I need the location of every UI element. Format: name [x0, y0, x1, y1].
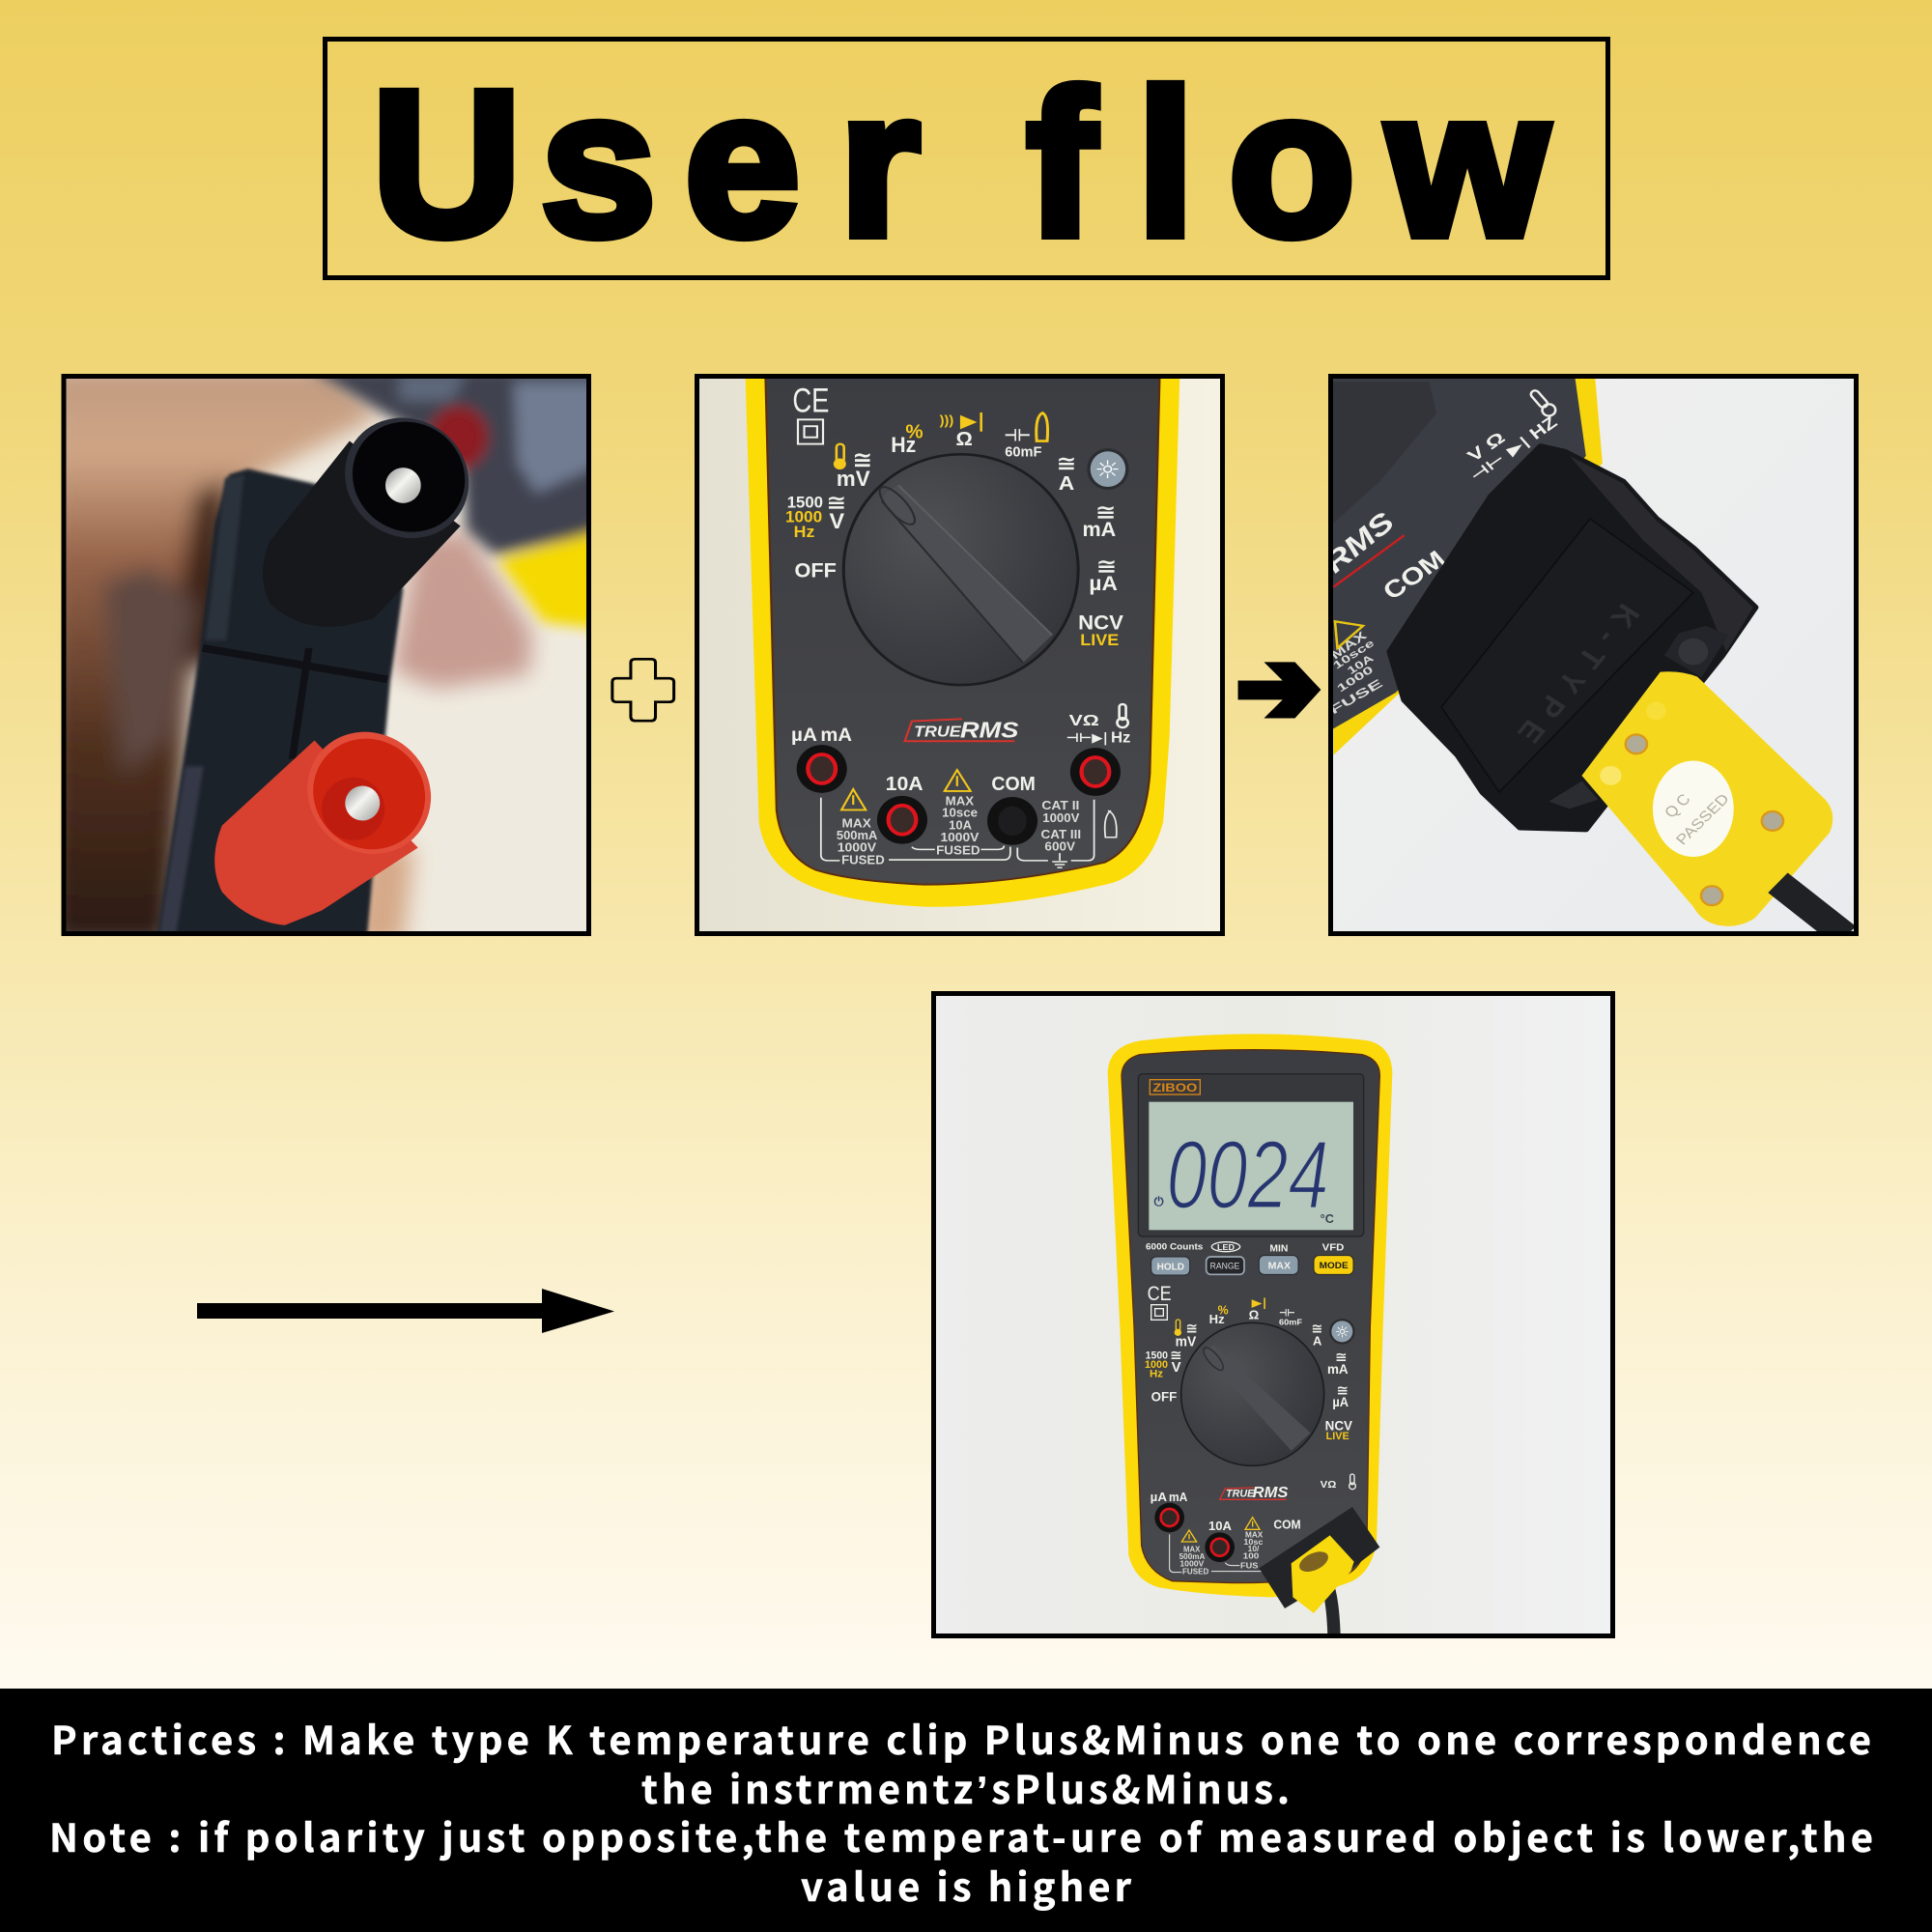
yellow plug [1292, 1535, 1354, 1613]
circuit rating text: CAT II [1041, 798, 1079, 812]
rotated meter labels [1318, 412, 1561, 717]
footer background [0, 1689, 1932, 1932]
TrueRMS logo: TRUE [914, 723, 961, 740]
jack sockets [1154, 1503, 1235, 1562]
jack labels: 10A [1208, 1519, 1232, 1533]
degree unit: °C [1321, 1212, 1334, 1226]
panel: complete multimeter photo [931, 991, 1615, 1638]
rotated meter labels: 10sce [1331, 638, 1377, 671]
circuit rating text: 1000V [940, 830, 980, 844]
dial labels: NCV [1325, 1418, 1353, 1434]
note line 2: value is higher [801, 1857, 1132, 1913]
note line 1: Note : if polarity just opposite,the temperat-ure of measured object is lower,the [49, 1807, 1873, 1863]
upper dial labels: ⊣⊢ [1279, 1307, 1295, 1320]
meter yellow housing [1108, 1034, 1392, 1597]
input jack labels: Hz [1111, 727, 1130, 746]
circuit rating text: CAT III [1041, 827, 1081, 841]
rotated meter labels: COM [1378, 546, 1451, 605]
ZIBOO logo [1150, 1080, 1200, 1094]
button labels [1146, 1241, 1344, 1254]
black connector body [156, 469, 403, 947]
dial labels: OFF [1151, 1389, 1178, 1405]
dial labels: ≅ [1336, 1383, 1349, 1399]
icon: thermometer [834, 444, 846, 469]
jack sockets [797, 745, 1121, 845]
dial labels: ⊣⊢ [1004, 427, 1031, 445]
RANGE button [1207, 1257, 1244, 1274]
dial labels: Hz [794, 523, 814, 541]
circuit rating text: 600V [1044, 838, 1076, 853]
dial labels: ≅ [1170, 1348, 1182, 1363]
HOLD button: HOLD [1157, 1262, 1184, 1272]
rating text [1179, 1531, 1264, 1576]
dial labels: 1500 [1146, 1350, 1168, 1362]
TrueRMS logo: TRUE [1226, 1488, 1255, 1499]
panel frame: meter close-up [697, 377, 1223, 933]
panel frame: complete multimeter [933, 993, 1613, 1636]
upper dial labels [1209, 1296, 1302, 1326]
black K-type connector: K-TYPE [1511, 598, 1647, 749]
rotary dial [843, 454, 1078, 685]
photo background [694, 367, 1226, 947]
panel: plug tips photo [66, 379, 586, 931]
double insulation icon [798, 419, 823, 444]
dial labels: ≅ [826, 492, 846, 515]
jack labels [1151, 1480, 1336, 1533]
rotated meter labels: 1000 [1335, 665, 1376, 695]
rotated meter labels: FUSE [1326, 676, 1385, 717]
dial labels: 1000 [785, 508, 822, 526]
panel: connector plugged into meter photo [1318, 367, 1862, 947]
upper dial labels: ▶| [1252, 1296, 1267, 1310]
red probe socket [214, 732, 431, 925]
dial labels: % [905, 420, 923, 442]
icon: thermometer white [1350, 1474, 1355, 1490]
input jack labels: VΩ [1069, 711, 1099, 729]
dial labels: OFF [795, 558, 837, 582]
power glyph: ⏻ [1154, 1194, 1165, 1208]
arrow: block arrow to result [1238, 662, 1321, 719]
circuit rating text: MAX [946, 793, 975, 808]
dial labels: V [830, 510, 844, 533]
dial labels: Hz [891, 434, 916, 458]
dial labels: mV [837, 469, 870, 492]
dial labels: ≅ [852, 446, 872, 473]
rating text: 100 [1243, 1551, 1260, 1560]
TrueRMS logo: RMS [960, 719, 1019, 743]
red label line [1333, 534, 1405, 588]
button labels: VFD [1322, 1243, 1344, 1254]
input jack labels: mA [820, 724, 852, 746]
jack connector lines [821, 798, 1117, 867]
yellow K-type plug [1581, 671, 1833, 926]
upper dial labels: Hz [1209, 1312, 1225, 1326]
dial labels: V [1172, 1360, 1181, 1376]
rating text: FUSED [1182, 1567, 1209, 1576]
jack labels: µA [1151, 1490, 1167, 1504]
TrueRMS logo: RMS [1253, 1485, 1289, 1501]
CE mark and insulation icon: CE [1148, 1282, 1172, 1305]
input jack labels [792, 715, 1130, 790]
icon: thermometer [1175, 1320, 1181, 1336]
button labels: 6000 Counts [1146, 1241, 1203, 1251]
meter dark face [1122, 1050, 1379, 1583]
MAX button [1259, 1256, 1298, 1274]
input jack labels: µA [791, 724, 817, 746]
LCD reading: 0024 [1166, 1122, 1329, 1230]
dial labels [1145, 1321, 1353, 1442]
backlight button: ☼ [1094, 456, 1121, 484]
CE mark: CE [792, 382, 830, 419]
arrow: long arrow to final result [197, 1289, 614, 1333]
dial labels: ≅ [1095, 501, 1117, 525]
circuit rating text: MAX [842, 815, 872, 830]
rotated meter labels: MAX [1327, 628, 1370, 662]
meter yellow housing [745, 367, 1180, 907]
thermocouple cable [1328, 1587, 1334, 1635]
dial labels: Ω [955, 428, 973, 450]
icon: thermometer rotated [1530, 389, 1557, 417]
footer band with instructions [0, 1689, 1932, 1932]
icon: plus sign [612, 659, 674, 721]
RANGE button: RANGE [1210, 1262, 1239, 1271]
rotated meter labels: ⊣⊢ ▶| [1467, 434, 1533, 485]
icons: warning triangles [1181, 1518, 1260, 1542]
dial labels: A [1313, 1334, 1322, 1349]
panel frame: plug tips [64, 377, 589, 933]
rating text: 1000V [1179, 1560, 1205, 1569]
dial labels: ≅ [1096, 555, 1117, 579]
dial labels: ≅ [1057, 452, 1076, 476]
rotary dial [1181, 1322, 1324, 1465]
black K-type connector [1259, 1507, 1379, 1608]
practices line 1: Practices : Make type K temperature clip Plus&Minus one to one correspondence [51, 1710, 1871, 1766]
dial labels: ≅ [1311, 1321, 1322, 1337]
dial fragment [1333, 383, 1436, 524]
circuit rating text: 10sce [942, 806, 978, 819]
black K-type connector [1390, 446, 1755, 829]
dial labels: 1000 [1145, 1359, 1168, 1371]
yellow K-type plug: PASSED [1673, 791, 1733, 848]
jack labels: mA [1169, 1490, 1188, 1504]
photo background [931, 991, 1615, 1638]
rating text: 500mA [1179, 1552, 1206, 1561]
TrueRMS logo [905, 719, 1019, 743]
dial labels: mA [1082, 518, 1116, 541]
title box [325, 39, 1607, 279]
panel frame: connector photo [1331, 377, 1857, 933]
photo background [66, 379, 586, 931]
LCD screen [1149, 1102, 1353, 1230]
rotated meter labels: RMS [1318, 507, 1401, 579]
ZIBOO logo: ZIBOO [1152, 1081, 1197, 1094]
upper dial labels: Ω [1249, 1308, 1259, 1321]
circuit rating text: 1000V [838, 839, 877, 854]
rotated meter labels: 10A [1346, 653, 1377, 677]
icon: warning triangle yellow [1335, 621, 1363, 648]
rating text: MAX [1183, 1546, 1201, 1554]
blurred meter behind [310, 379, 586, 639]
circuit rating text: 10A [949, 817, 972, 832]
circuit rating text: 500mA [837, 828, 877, 842]
dial labels: Hz [1150, 1368, 1163, 1379]
panel: meter close-up photo [694, 367, 1226, 947]
rating text: MAX [1245, 1531, 1264, 1540]
blurred fingers [48, 367, 532, 947]
CE mark and insulation icon [1148, 1282, 1172, 1320]
jack labels: VΩ [1321, 1480, 1336, 1491]
meter yellow edge [1333, 367, 1603, 755]
TrueRMS logo [1220, 1485, 1289, 1501]
dial labels: mA [1327, 1361, 1349, 1377]
rotated meter labels: HZ [1525, 412, 1561, 443]
black probe socket [263, 417, 469, 626]
QC label sticker [1653, 761, 1734, 857]
rating text: 10sc [1243, 1538, 1264, 1547]
yellow K-type plug: Q C [1662, 791, 1694, 821]
icons: warning triangles [841, 770, 971, 810]
dial labels: A [1059, 471, 1074, 495]
button labels: LED [1217, 1243, 1235, 1252]
dial labels: ))) [940, 413, 953, 428]
dial labels: LIVE [1326, 1431, 1350, 1442]
meter dark face [765, 367, 1160, 885]
MODE button: MODE [1320, 1261, 1349, 1270]
MODE button [1314, 1256, 1353, 1274]
dial labels: ▶| [960, 410, 985, 433]
photo background [1326, 367, 1862, 947]
dial labels: µA [1089, 571, 1118, 595]
dial labels: NCV [1078, 611, 1124, 634]
button labels: MIN [1269, 1243, 1288, 1254]
circuit rating text: 1000V [1042, 810, 1080, 825]
backlight button: ☼ [1335, 1323, 1350, 1342]
jack labels: COM [1273, 1518, 1301, 1531]
dial labels: ≅ [1335, 1350, 1348, 1365]
practices line 2: the instrmentz’sPlus&Minus. [641, 1759, 1290, 1815]
LCD bezel [1138, 1074, 1364, 1236]
dial labels: mV [1176, 1334, 1197, 1350]
dial labels: µA [1332, 1394, 1349, 1409]
backlight button [1087, 448, 1129, 490]
input jack labels: ⊣⊢▶| [1066, 731, 1108, 746]
dial labels: 60mF [1005, 444, 1041, 460]
backlight button [1329, 1319, 1355, 1345]
rating text: FUS [1240, 1561, 1259, 1570]
dial labels: ≅ [1185, 1321, 1198, 1337]
dial labels [785, 410, 1124, 648]
circuit rating text [837, 793, 1081, 867]
dial labels: 1500 [787, 493, 823, 511]
circuit rating text: FUSED [936, 842, 980, 857]
title text: User flow [372, 48, 1548, 279]
dial labels: LIVE [1080, 631, 1119, 648]
icon: thermometer white [1117, 704, 1128, 727]
input jack labels: 10A [886, 772, 923, 795]
meter dark body [1326, 367, 1586, 733]
plug screws [1626, 734, 1783, 905]
rotated meter labels: V Ω [1463, 428, 1509, 466]
HOLD button [1151, 1257, 1190, 1275]
input jack labels: COM [991, 772, 1036, 795]
circuit rating text: FUSED [841, 853, 885, 867]
jack connector lines [1170, 1534, 1263, 1573]
upper dial labels: 60mF [1279, 1317, 1302, 1326]
plug cable [1777, 883, 1846, 936]
upper dial labels: % [1218, 1304, 1229, 1318]
title frame [325, 39, 1607, 278]
icon: clamp probe yellow [1037, 412, 1048, 441]
MAX button: MAX [1268, 1262, 1291, 1272]
rating text: 10/ [1248, 1545, 1260, 1553]
